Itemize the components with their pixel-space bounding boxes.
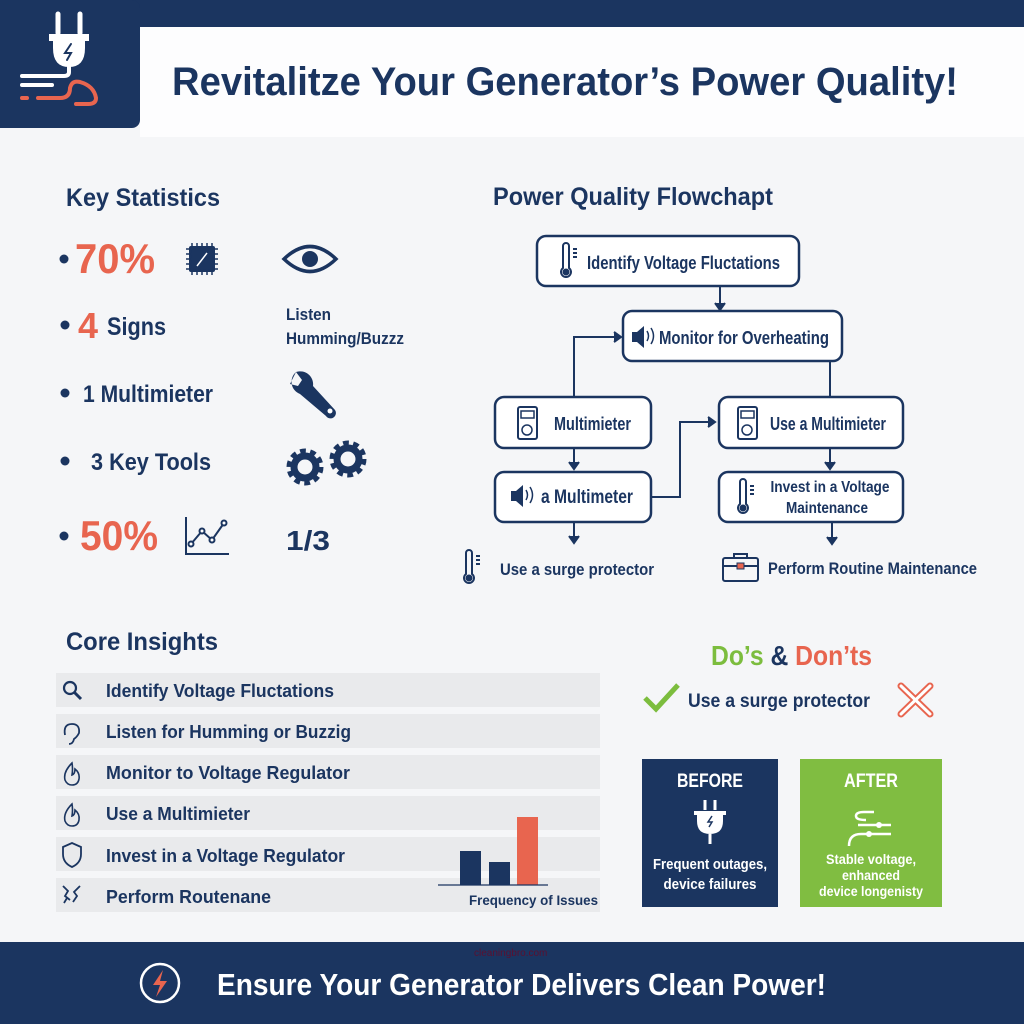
bar chart: frequency of issues — [438, 817, 598, 908]
heading: key statistics: Key Statistics — [66, 184, 220, 212]
insight row 3: Monitor to Voltage Regulator — [106, 763, 350, 783]
stat: 3 key tools: 3 Key Tools — [91, 449, 211, 476]
card: before: Frequent outages, — [653, 856, 767, 873]
node: monitor overheating: Monitor for Overheating — [659, 328, 829, 348]
title: Revitalitze Your Generator’s Power Quality! — [172, 60, 958, 104]
node: identify voltage: Identify Voltage Fluctations — [587, 253, 780, 273]
icon: cross — [901, 686, 930, 714]
node: use a multimieter — [738, 407, 886, 439]
watermark: cleaningbro.com — [474, 948, 547, 959]
node: multimieter: Multimieter — [554, 414, 631, 434]
heading: flowchart: Power Quality Flowchapt — [493, 183, 774, 211]
arrows: flowchart connectors — [569, 286, 837, 544]
stat: 70%: 70% — [75, 235, 155, 282]
node: perform routine maintenance: Perform Routine Maintenance — [768, 559, 977, 578]
icon: chip — [186, 243, 218, 275]
heading: core insights: Core Insights — [66, 628, 218, 656]
text: listen humming — [286, 305, 404, 348]
card: before: BEFORE — [677, 771, 743, 792]
node: multimieter — [518, 407, 631, 439]
stat: 4 signs: Signs — [107, 313, 166, 341]
card: before — [642, 759, 778, 907]
card: after: AFTER — [844, 771, 898, 792]
stat: 4 signs — [60, 305, 166, 346]
icon: gears — [291, 445, 362, 481]
card: after: Stable voltage, — [826, 851, 916, 867]
insight row 5: Invest in a Voltage Regulator — [106, 846, 345, 866]
insight row 1: Identify Voltage Fluctations — [106, 681, 334, 701]
footer text: Ensure Your Generator Delivers Clean Power! — [217, 967, 826, 1002]
node: identify voltage — [561, 243, 780, 277]
node: perform routine maintenance — [723, 554, 977, 581]
insight row 2: Listen for Humming or Buzzig — [106, 722, 351, 742]
panel: key statistics — [60, 184, 404, 559]
node: a multimeter: a Multimeter — [541, 487, 633, 508]
node: invest voltage maintenance — [738, 479, 890, 517]
stat: 4 signs: 4 — [78, 305, 98, 346]
stat: 50%: 50% — [80, 512, 158, 559]
panel: core insights — [56, 628, 600, 912]
node: invest voltage maintenance: Maintenance — [786, 500, 868, 517]
text: listen humming: Listen — [286, 305, 331, 324]
icon: eye — [284, 246, 336, 272]
icon: wrench — [290, 371, 336, 418]
insight row 4: Use a Multimieter — [106, 804, 250, 824]
card: after: enhanced — [842, 867, 900, 883]
stat: 1 multimieter: 1 Multimieter — [83, 381, 213, 408]
card: before: device failures — [664, 876, 756, 893]
node: use a multimieter: Use a Multimieter — [770, 414, 886, 434]
icon: check — [645, 685, 678, 709]
card: after — [800, 759, 942, 907]
stat: 1/3: 1/3 — [286, 525, 330, 556]
node: use a surge protector: Use a surge protector — [500, 560, 654, 579]
bar chart: frequency of issues: Frequency of Issues — [469, 892, 598, 908]
footer banner — [0, 942, 1024, 1024]
insight row 5 — [63, 843, 345, 867]
card: after: device longenisty — [819, 883, 923, 899]
icon: line chart — [186, 517, 229, 554]
text: use a surge protector: Use a surge protector — [688, 691, 871, 712]
insight row 6: Perform Routenane — [106, 887, 271, 907]
header band — [0, 0, 1024, 137]
node: monitor overheating — [632, 326, 829, 348]
insight row 4 — [65, 804, 250, 826]
panel: flowchart — [464, 183, 977, 583]
heading: dos & donts: Do’s & Don’ts — [711, 640, 872, 671]
icon: lightning circle — [141, 964, 179, 1002]
node: invest voltage maintenance: Invest in a Voltage — [770, 479, 890, 496]
node: a multimeter — [511, 485, 633, 508]
text: listen humming: Humming/Buzzz — [286, 329, 404, 348]
panel: dos and donts — [642, 640, 942, 907]
icon: plug logo — [22, 14, 96, 104]
node: use a surge protector — [464, 550, 654, 583]
